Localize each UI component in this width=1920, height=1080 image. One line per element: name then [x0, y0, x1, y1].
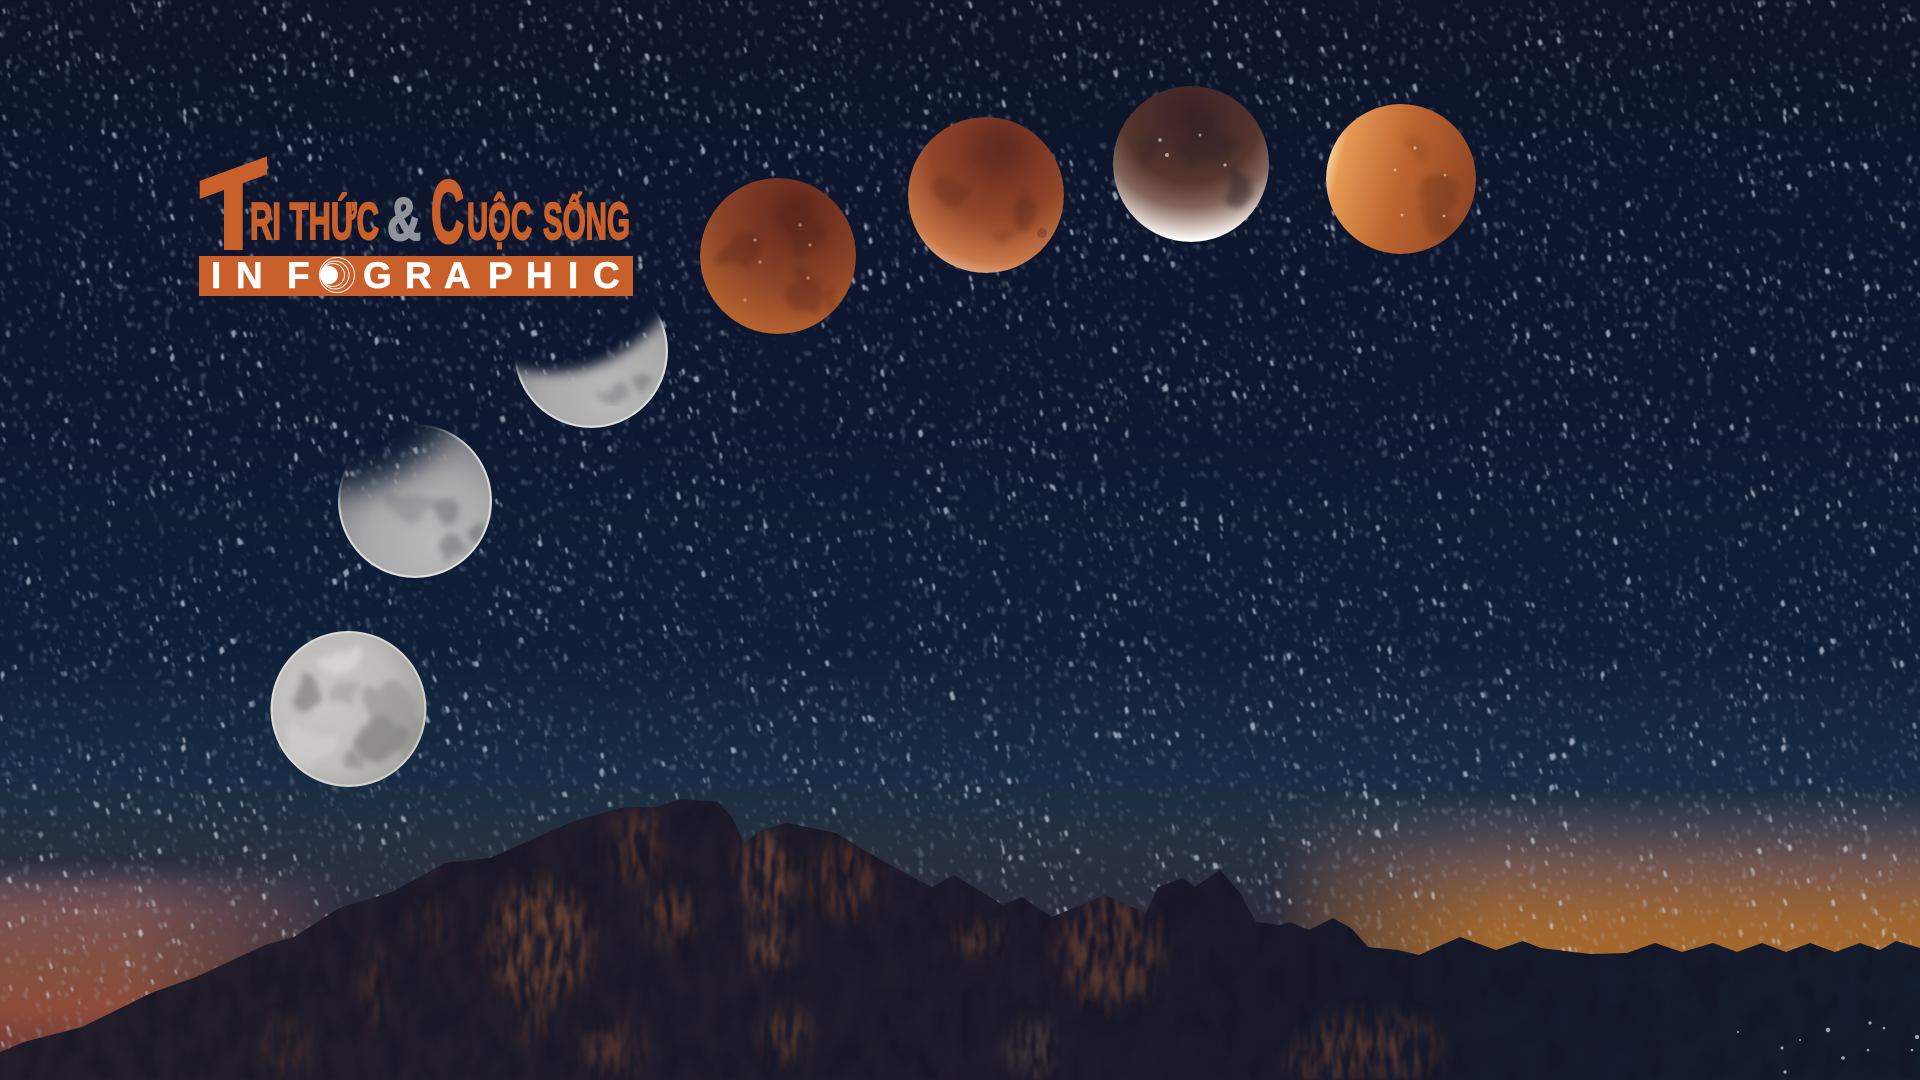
moon 3: crescent: [514, 310, 668, 428]
mountain range: [0, 790, 1920, 1080]
logo title: SỐNG: SỐNG: [543, 192, 630, 251]
moon 1: full moon: [270, 631, 426, 787]
moon 4: blood moon: [700, 178, 856, 334]
icon: moon O in Infographic: [320, 258, 354, 292]
banner text: INF: INF: [211, 255, 310, 296]
logo ampersand: &: [387, 186, 421, 253]
logo title: UỘC: UỘC: [467, 192, 532, 251]
rock texture: [0, 790, 1920, 1080]
logo title: big C: C: [431, 162, 464, 261]
bright limb: [272, 632, 426, 786]
orange glow on the right horizon: [1270, 790, 1920, 960]
banner text: GRAPHIC: GRAPHIC: [363, 255, 620, 296]
logo title: RI THỨC: RI THỨC: [250, 193, 379, 251]
moon 7: copper moon: [1326, 104, 1476, 254]
stars over the lower right foreground: [1737, 1021, 1919, 1074]
rust rock highlights: [260, 808, 1445, 1080]
bright limb: [515, 313, 668, 428]
moon 2: partial eclipse: [338, 424, 492, 578]
bright limb: [339, 425, 491, 577]
logo banner: [199, 256, 633, 296]
moon 6: eclipse with white lower limb: [1113, 86, 1269, 242]
logo roof-shaped T: T: [200, 131, 267, 300]
logo: Tri thức & Cuộc sống Infographic: [199, 156, 633, 296]
pink glow on the left horizon: [0, 866, 337, 1052]
moon 5: blood moon with bright limb: [908, 117, 1064, 273]
